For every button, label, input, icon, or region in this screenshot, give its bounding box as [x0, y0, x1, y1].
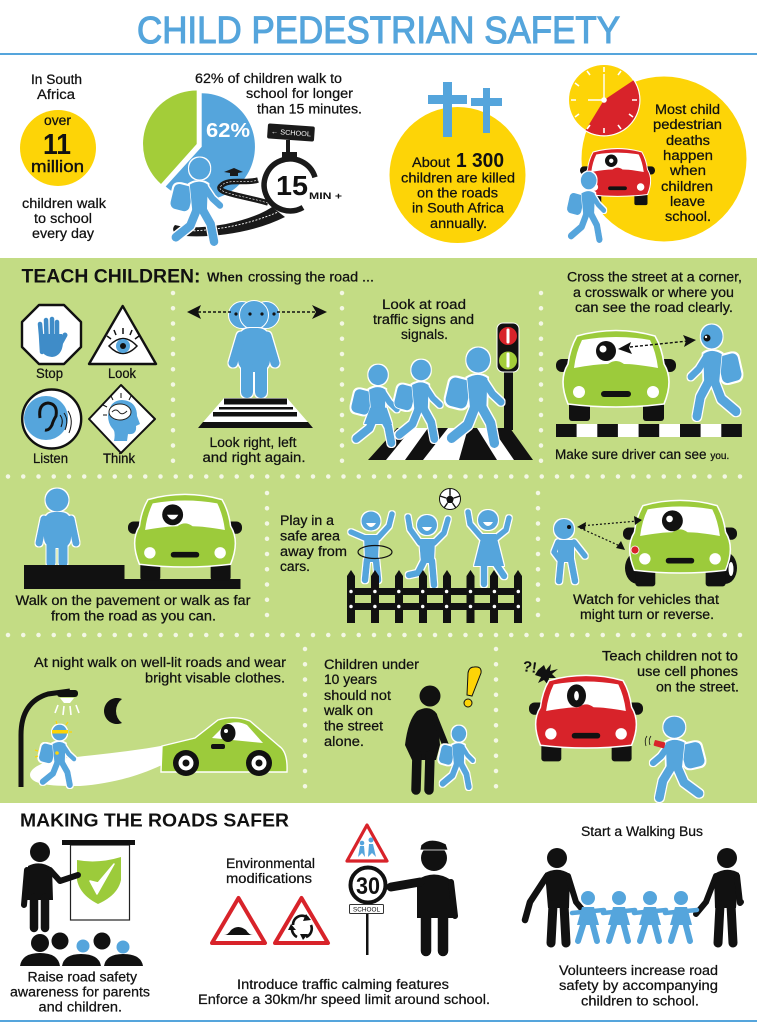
figure: police officer — [391, 840, 455, 951]
icon: soccer ball — [440, 488, 460, 510]
circle: deaths when children leave school: Most child — [655, 102, 720, 117]
stat: 11 million children walk: over — [44, 113, 72, 128]
crosswalk with stripes — [368, 428, 533, 460]
icon: green car on road — [128, 494, 242, 580]
pie chart: 62% walk longer than 15 minutes: 62% — [206, 120, 250, 142]
text: watch for vehicles: Watch for vehicles that — [573, 592, 719, 607]
icon: stopwatch 15 min: ← SCHOOL — [271, 129, 311, 138]
figure: child watching vehicle — [554, 519, 585, 581]
stat: 11 million children walk: children walk — [22, 196, 106, 211]
circle: deaths when children leave school: children — [661, 179, 713, 194]
circle: deaths when children leave school: pedestrian — [653, 117, 722, 132]
figure: child walking — [169, 158, 220, 242]
sign: look — [89, 306, 156, 381]
text: raise road safety awareness: Raise road safety — [28, 970, 137, 984]
text: look right, left: and right again. — [202, 450, 306, 465]
figure: child leaving school — [566, 172, 604, 239]
icon: exclamation mark — [464, 667, 481, 707]
icon: stopwatch 15 min: 15 — [276, 170, 308, 201]
icon: green car with driver — [556, 330, 676, 421]
headlight beam — [30, 745, 166, 786]
sign post: 30 km speed limit: 30 — [356, 873, 380, 900]
text: look right, left — [202, 435, 306, 465]
icon: shield with check — [77, 857, 121, 904]
figure: child looking left and right — [228, 300, 280, 392]
text: 62% of children walk — [195, 71, 362, 116]
sign: look: Look — [108, 366, 136, 381]
figure: child with phone — [645, 717, 706, 798]
text: cross the street at a corner: a crosswalk or where you — [573, 285, 734, 300]
text: children under 10 years: Children under — [324, 657, 420, 672]
icon: stopwatch 15 min — [264, 123, 343, 211]
heading: teach children: crossing the road ... — [248, 270, 374, 284]
text: volunteers increase road safety: safety by accompanying — [559, 978, 718, 993]
figures: three children crossing — [350, 348, 501, 443]
sign post: 30 km speed limit: SCHOOL — [353, 906, 380, 914]
text: children under 10 years: should not — [324, 688, 391, 703]
text: traffic calming features — [198, 977, 490, 1007]
text: at night walk: At night walk on well-lit roads and wear — [34, 655, 287, 670]
stat: 1 300 children killed: on the roads — [417, 186, 498, 200]
text: look at road traffic signs: signals. — [401, 327, 448, 342]
text: volunteers increase road safety — [559, 963, 718, 1008]
text: children under 10 years: 10 years — [324, 672, 377, 687]
arrow: driver and child — [618, 335, 696, 354]
presentation board — [62, 840, 135, 920]
circle: deaths when children leave school — [582, 76, 746, 242]
text: look at road traffic signs: Look at road — [382, 297, 466, 312]
icon: traffic light — [497, 323, 519, 430]
sign: listen: Listen — [33, 451, 68, 466]
stat: 11 million children walk: to school — [34, 211, 92, 226]
text: at night walk — [34, 655, 287, 686]
heading: teach children: TEACH CHILDREN: — [22, 266, 201, 288]
figure: volunteer right — [696, 848, 741, 943]
text: watch for vehicles: might turn or reverse. — [580, 607, 714, 622]
circle: deaths when children leave school: deaths — [666, 133, 710, 148]
crosses — [428, 82, 502, 137]
icon: moon — [104, 698, 122, 724]
text: play in a safe area: cars. — [280, 559, 310, 574]
crosswalk — [198, 398, 313, 428]
text: play in a safe area: away from — [280, 544, 347, 559]
text: make sure driver can see you: Make sure driver can see you. — [555, 447, 729, 462]
stat: 1 300 children killed — [390, 107, 526, 243]
title: CHILD PEDESTRIAN SAFETY — [137, 10, 620, 52]
figure: presenter — [24, 842, 78, 928]
text: play in a safe area: safe area — [280, 528, 341, 544]
stat: 11 million children walk — [20, 72, 106, 241]
text: volunteers increase road safety: Volunteers increase road — [559, 963, 718, 978]
text: volunteers increase road safety: children to school. — [581, 994, 699, 1008]
stat: 1 300 children killed: in South Africa — [412, 200, 505, 216]
circle: deaths when children leave school: school. — [665, 209, 711, 224]
stat: 1 300 children killed: About — [412, 155, 450, 170]
panel: green teach children background — [0, 258, 757, 803]
sign: listen — [22, 390, 81, 466]
text: traffic calming features: Enforce a 30km/hr speed limit around school. — [198, 992, 490, 1007]
icon: horn burst — [522, 658, 558, 685]
text: cross the street at a corner: can see the road clearly. — [575, 300, 733, 315]
figure: child on pavement — [39, 488, 76, 563]
icon: car at night side view — [161, 718, 287, 776]
icon: clock — [568, 64, 640, 136]
figures: children playing — [351, 510, 509, 585]
text: raise road safety awareness — [10, 970, 150, 1014]
text: play in a safe area: Play in a — [280, 513, 335, 528]
stat: 1 300 children killed: 1 300 — [456, 150, 504, 172]
text: at night walk: bright visable clothes. — [145, 670, 285, 686]
text: children under 10 years — [323, 657, 420, 749]
stat: 1 300 children killed: annually. — [430, 216, 487, 231]
winding road — [173, 168, 285, 236]
text: watch for vehicles — [573, 592, 719, 622]
street lamp — [21, 690, 79, 787]
text: children under 10 years: walk on — [323, 703, 373, 718]
arrows: look left and right — [187, 305, 327, 319]
text: walk on the pavement: Walk on the pavement or walk as far — [16, 593, 251, 608]
text: teach children not to use cell phones: use cell phones — [637, 664, 738, 679]
text: look at road traffic signs: traffic signs and — [373, 312, 474, 327]
heading: making the roads safer: MAKING THE ROADS SAFER — [20, 810, 289, 830]
stat: 11 million children walk: every day — [32, 226, 94, 241]
sign post: 30 km speed limit — [347, 825, 387, 955]
text: start a walking bus: Start a Walking Bus — [581, 824, 703, 839]
checkered road strip — [556, 424, 742, 437]
text: play in a safe area — [280, 513, 347, 574]
figure: child making eye contact — [691, 325, 743, 416]
text: children under 10 years: the street — [324, 718, 383, 734]
sign: roundabout — [275, 898, 328, 943]
circle: deaths when children leave school: happen — [663, 148, 713, 163]
text: cross the street at a corner — [567, 270, 742, 315]
text: 62% of children walk: school for longer — [246, 86, 354, 101]
pavement — [24, 565, 240, 589]
icon: red car — [529, 675, 643, 761]
text: teach children not to use cell phones: Teach children not to — [602, 648, 738, 664]
arrows: watch vehicles — [577, 516, 642, 550]
sign: think: Think — [103, 451, 135, 466]
sign: think — [89, 385, 155, 466]
sign: stop: Stop — [36, 366, 63, 381]
hula hoop — [358, 546, 392, 558]
text: raise road safety awareness: and children. — [38, 1000, 122, 1014]
text: look right, left: Look right, left — [210, 435, 297, 450]
pie chart: 62% walk longer than 15 minutes — [143, 90, 255, 200]
heading: teach children: When — [207, 270, 243, 284]
text: environmental modifications — [226, 856, 315, 886]
text: cross the street at a corner: Cross the street at a corner, — [567, 270, 742, 284]
audience — [20, 932, 143, 966]
text: look at road traffic signs — [373, 297, 474, 342]
icon: horn burst: ?! — [522, 658, 538, 677]
text: children under 10 years: alone. — [324, 734, 364, 749]
text: 62% of children walk: than 15 minutes. — [257, 102, 362, 116]
circle: deaths when children leave school: leave — [670, 194, 705, 209]
stat: 1 300 children killed: children are killed — [401, 170, 515, 186]
stat: 11 million children walk: million — [31, 157, 84, 176]
text: raise road safety awareness: awareness for parents — [10, 984, 150, 1000]
circle: deaths when children leave school: when — [669, 163, 706, 178]
sign: speed hump — [212, 898, 265, 943]
icon: reversing car — [623, 500, 737, 586]
icon: stopwatch 15 min: MIN + — [309, 191, 343, 202]
sign: stop — [22, 305, 81, 381]
text: traffic calming features: Introduce traffic calming features — [237, 977, 449, 992]
heading: teach children — [22, 266, 374, 288]
text: teach children not to use cell phones — [602, 648, 739, 694]
fence — [347, 570, 522, 623]
text: teach children not to use cell phones: on the street. — [656, 680, 739, 694]
figures: children in walking bus — [572, 891, 697, 941]
icon: red car and driver — [580, 149, 655, 205]
text: 62% of children walk: 62% of children walk to — [195, 71, 342, 86]
text: walk on the pavement — [16, 593, 251, 624]
figure: child at night — [35, 721, 74, 785]
figure: adult with child — [405, 686, 473, 790]
text: environmental modifications: modifications — [226, 871, 312, 886]
text: walk on the pavement: from the road as you can. — [51, 608, 216, 624]
text: environmental modifications: Environmental — [226, 856, 315, 871]
stat: 11 million children walk: 11 — [43, 129, 71, 161]
bottom line — [0, 1020, 757, 1022]
stat: 11 million children walk: Africa — [37, 87, 76, 102]
figure: volunteer left — [525, 848, 586, 943]
stat: 11 million children walk: In South — [31, 72, 82, 87]
